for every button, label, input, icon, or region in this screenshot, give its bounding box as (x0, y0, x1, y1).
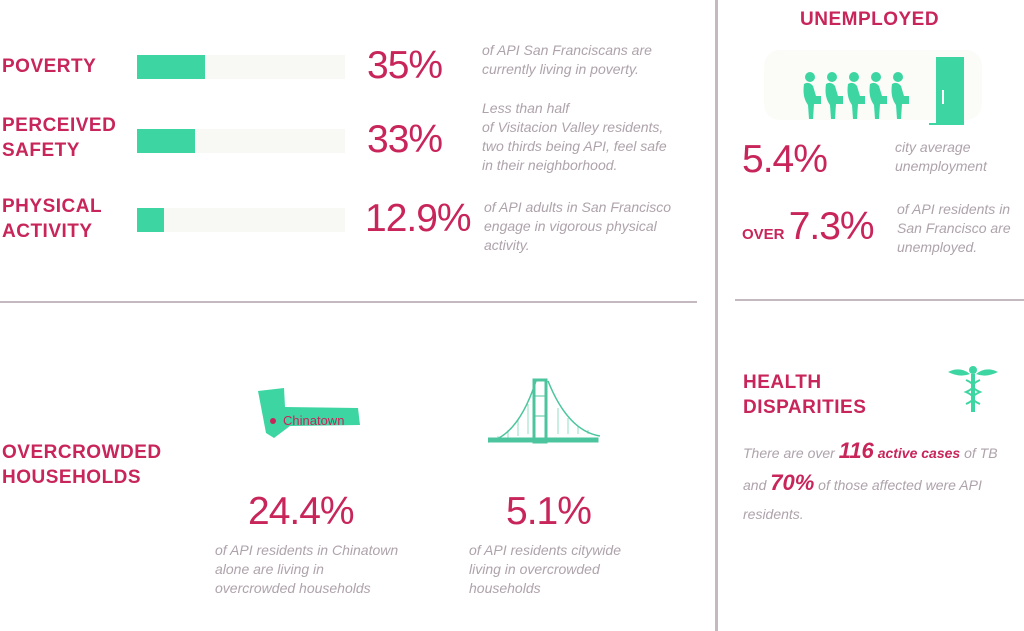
heading: overcrowded: HOUSEHOLDS (2, 467, 141, 488)
icon: chinatown map (258, 388, 360, 438)
text: chinatown (215, 542, 398, 596)
heading: physical activity: PHYSICAL (2, 196, 102, 217)
number: over 7.3%: OVER 7.3% (742, 205, 874, 248)
text: activity (484, 199, 671, 253)
text: safety: of Visitacion Valley residents, (482, 119, 663, 135)
number: 35%: 35% (367, 44, 442, 87)
heading: overcrowded (2, 442, 162, 488)
icon: chinatown map: Chinatown (283, 413, 344, 428)
text: citywide: of API residents citywide (469, 542, 621, 558)
heading: health disparities (743, 372, 866, 418)
bar: poverty (137, 55, 345, 79)
text: TB: There are over 116 active cases of TB and 70% of those affected were API residents. (743, 438, 998, 522)
heading: overcrowded: OVERCROWDED (2, 442, 162, 463)
heading: poverty: POVERTY (2, 56, 96, 77)
text: city average: city average (895, 139, 970, 155)
text: poverty: currently living in poverty. (482, 61, 639, 77)
bar: activity (137, 208, 345, 232)
text: safety: Less than half (482, 100, 569, 116)
text: citywide: living in overcrowded (469, 561, 600, 577)
heading: perceived safety: SAFETY (2, 140, 80, 161)
icon: people and door (764, 50, 982, 120)
text: API unemployed (897, 201, 1011, 255)
text: API unemployed: San Francisco are (897, 220, 1011, 236)
icon: caduceus (948, 366, 998, 412)
text: poverty: of API San Franciscans are (482, 42, 652, 58)
icon: bridge (488, 378, 600, 444)
heading: physical activity: ACTIVITY (2, 221, 93, 242)
heading: perceived safety: PERCEIVED (2, 115, 116, 136)
heading: physical activity (2, 196, 102, 242)
number: 12.9%: 12.9% (365, 197, 471, 240)
text: activity: activity. (484, 237, 530, 253)
text: city average (895, 139, 988, 174)
text: citywide (469, 542, 621, 596)
heading: health disparities: DISPARITIES (743, 397, 866, 418)
number: 5.4%: 5.4% (742, 138, 827, 181)
text: poverty (482, 42, 652, 77)
text: activity: of API adults in San Francisco (484, 199, 671, 215)
heading: health disparities: HEALTH (743, 372, 822, 393)
text: chinatown: alone are living in (215, 561, 324, 577)
text: citywide: households (469, 580, 541, 596)
text: safety: in their neighborhood. (482, 157, 617, 173)
heading: perceived safety (2, 115, 116, 161)
number: 24.4%: 24.4% (248, 490, 354, 533)
text: API unemployed: of API residents in (897, 201, 1010, 217)
number: 5.1%: 5.1% (506, 490, 591, 533)
heading: unemployed: UNEMPLOYED (800, 9, 939, 30)
bar: safety (137, 129, 345, 153)
text: safety: two thirds being API, feel safe (482, 138, 667, 154)
text: activity: engage in vigorous physical (484, 218, 657, 234)
text: chinatown: overcrowded households (215, 580, 371, 596)
text: safety (482, 100, 667, 173)
number: 33%: 33% (367, 118, 442, 161)
text: chinatown: of API residents in Chinatown (215, 542, 398, 558)
text: API unemployed: unemployed. (897, 239, 977, 255)
text: city average: unemployment (895, 158, 987, 174)
